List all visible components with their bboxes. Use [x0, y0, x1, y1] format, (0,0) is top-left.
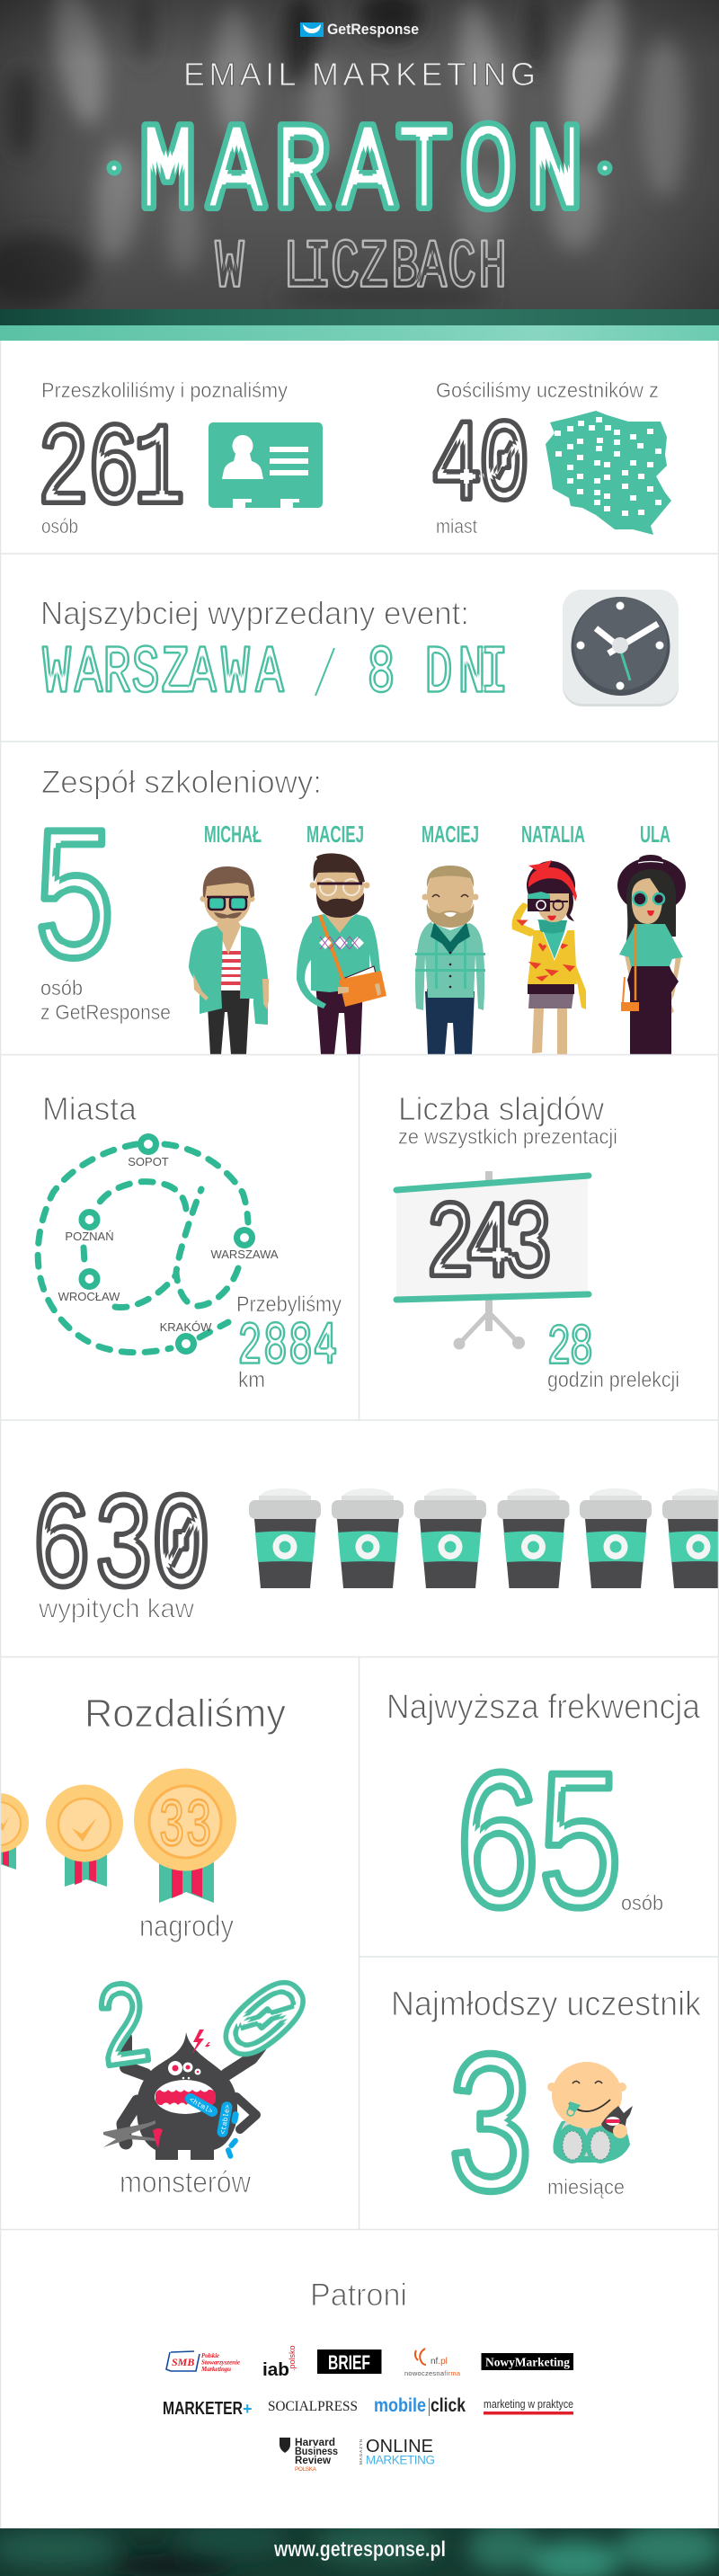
route stop: Sopot: [128, 1136, 169, 1168]
logo: SMB: Polskie: [201, 2352, 219, 2359]
name labels: MICHAŁ: [204, 821, 262, 848]
logo: SMB: SMB: [172, 2356, 194, 2368]
icon: coffee cup 2: [332, 1488, 404, 1588]
caption: godzin prelekcji: [547, 1368, 679, 1392]
icon: large medal 33: 33: [158, 1789, 212, 1866]
route stop: Sopot: SOPOT: [128, 1155, 169, 1168]
caption: monsters: monsterów: [120, 2165, 251, 2198]
name labels: NATALIA: [521, 821, 585, 848]
route stop: Kraków: [160, 1320, 212, 1352]
caption: 5 people: z GetResponse: [40, 1000, 171, 1024]
footer band: [0, 2524, 719, 2576]
name labels: ULA: [640, 821, 670, 848]
logo: marketing w praktyce: marketing w praktyce: [484, 2397, 573, 2411]
number 0 held by monster: 0: [182, 1954, 333, 2095]
unit label: miast: [436, 515, 477, 537]
logo: Brief: BRIEF: [328, 2351, 370, 2374]
number 2 held by monster: 2: [89, 1962, 160, 2101]
logo: Online Marketing: ONLINE: [366, 2437, 433, 2456]
logo: GetResponse: GetResponse: [327, 21, 419, 38]
icon: ID card: [209, 422, 323, 508]
heading: Gościliśmy uczestników z: [436, 378, 659, 402]
heading: Rozdaliśmy: [84, 1692, 286, 1736]
logo: iab polska: iab: [262, 2360, 289, 2380]
logo: Marketer+: MARKETER: [163, 2399, 243, 2419]
logo: mobile click: [374, 2395, 466, 2416]
decorative title dots: [106, 160, 613, 176]
icon: coffee cup 5: [580, 1488, 652, 1588]
logo: Harvard Business Review: [280, 2438, 338, 2473]
route stop: Poznań: POZNAŃ: [65, 1230, 114, 1243]
number 243: 243: [426, 1186, 553, 1308]
caption: 5 people: [40, 976, 171, 1024]
illustration: baby: [547, 2062, 633, 2163]
logo: SMB: [166, 2351, 240, 2373]
panel: trained people: [38, 378, 323, 537]
panel: youngest participant: [391, 1985, 702, 2251]
title: W liczbach: W LICZBACH: [216, 231, 507, 306]
name labels: MACIEJ: [306, 821, 364, 848]
logo: iab polska: [262, 2345, 297, 2380]
heading: Przeszkoliliśmy i poznaliśmy: [41, 378, 288, 402]
name labels: MACIEJ: [422, 821, 479, 848]
icon: coffee cup 3: [414, 1488, 486, 1588]
figure: Natalia with camera: [512, 860, 586, 1054]
route stop: Warszawa: WARSZAWA: [210, 1248, 279, 1261]
panel: cities of origin: [431, 378, 671, 537]
panel: patrons: [163, 2278, 573, 2473]
illustration: monster: [103, 2030, 261, 2160]
number 40: 40: [431, 403, 530, 533]
panel: highest attendance: [386, 1688, 701, 1967]
route stop: Warszawa: [210, 1230, 279, 1261]
caption: months: miesiące: [547, 2175, 625, 2198]
logo: mobile click: click: [431, 2395, 466, 2416]
icon: clock: [563, 590, 679, 706]
logo: Online Marketing: MAGAZYN: [359, 2439, 363, 2465]
caption: awards: nagrody: [139, 1909, 234, 1942]
logo: marketing w praktyce: [484, 2397, 573, 2414]
logo: Online Marketing: [359, 2437, 435, 2466]
illustration: monster: <html>: [188, 2096, 214, 2116]
logo: NowyMarketing: NowyMarketing: [485, 2357, 570, 2369]
icon: coffee cup 6: [662, 1488, 719, 1588]
heading: Patroni: [310, 2278, 407, 2313]
footer url: www.getresponse.pl: [273, 2537, 446, 2562]
figure: Maciej in plaid shirt: [415, 866, 485, 1054]
figure: Maciej with bag: [297, 853, 386, 1054]
panel: coffee: [36, 1488, 718, 1622]
number 630: [36, 1492, 208, 1589]
icon: small medal: [0, 1793, 29, 1870]
route stop: Wrocław: [58, 1271, 120, 1303]
panel: slides count: [396, 1090, 679, 1392]
icon: large medal 33: [134, 1769, 236, 1903]
unit: km: km: [238, 1368, 265, 1392]
icon: coffee cup 4: [498, 1488, 570, 1588]
map of Poland: [546, 411, 671, 535]
heading: Najmłodszy uczestnik: [391, 1985, 702, 2023]
illustration: monster: <table>: [219, 2104, 233, 2136]
panel: monsters: [89, 1954, 333, 2198]
heading: Najszybciej wyprzedany event:: [40, 595, 469, 631]
number 261: 261: [38, 406, 185, 537]
route stop: Poznań: [65, 1212, 114, 1243]
number 5: 5: [31, 799, 118, 1014]
logo: nf.pl: nf.pl: [431, 2357, 448, 2367]
caption: 5 people: osób: [40, 976, 83, 999]
dashed route map: [38, 1144, 248, 1353]
unit label: osób: [621, 1891, 663, 1914]
name labels: [204, 821, 670, 848]
caption: wypitych kaw: [38, 1594, 194, 1623]
logo: nf.pl: [404, 2349, 461, 2377]
number 630: 630: [31, 1473, 211, 1626]
logo: mobile click: mobile: [374, 2395, 426, 2416]
title: Email Marketing: EMAIL MARKETING: [183, 56, 536, 93]
figure: Ula with hat: [617, 855, 686, 1054]
logo: iab polska: .polsko: [288, 2345, 297, 2371]
logo: Marketer+: +: [243, 2400, 253, 2418]
heading: Miasta: [42, 1090, 138, 1127]
value: Warszawa: WARSZAWA: [43, 637, 284, 712]
panel: training team: [31, 765, 686, 1054]
logo: Harvard Business Review: Business: [295, 2447, 338, 2457]
logo: Harvard Business Review: Review: [295, 2456, 331, 2466]
panel: awards: [0, 1692, 286, 1942]
number 28: 28: [547, 1318, 593, 1381]
route stop: Wrocław: WROCŁAW: [58, 1290, 120, 1303]
value: 8 dni: 8 DNI: [368, 637, 509, 712]
subheading: ze wszystkich prezentacji: [398, 1125, 617, 1149]
label: travelled: Przebyliśmy: [236, 1292, 342, 1317]
logo: SocialPress: SOCIALPRESS: [268, 2399, 358, 2414]
number 3: 3: [445, 2021, 536, 2251]
heading: Zespół szkoleniowy:: [41, 765, 322, 800]
panel: fastest sold out event: [40, 590, 679, 712]
logo: Online Marketing: MARKETING: [366, 2454, 435, 2466]
heading: Liczba slajdów: [398, 1090, 605, 1127]
logo: SMB: Stowarzyszenie: [201, 2358, 240, 2366]
heading: Najwyższa frekwencja: [386, 1688, 701, 1726]
icon: projection screen: [396, 1171, 589, 1350]
panel: cities route: [38, 1090, 342, 1392]
logo: Harvard Business Review: POLSKA: [295, 2466, 317, 2473]
route stop: Kraków: KRAKÓW: [160, 1320, 212, 1334]
icon: medium medal: [46, 1785, 123, 1887]
header photo background: [0, 0, 719, 309]
number 2884: 2884: [238, 1313, 337, 1381]
icon: coffee cup 1: [249, 1488, 321, 1588]
slash divider: [315, 648, 334, 696]
logo: nf.pl: nowoczesnafirma: [404, 2369, 461, 2377]
number 65: 65: [452, 1740, 626, 1967]
figure: Michał: [189, 866, 269, 1054]
title: Maraton: MARATON: [139, 106, 583, 244]
unit label: osób: [41, 515, 78, 537]
logo: SMB: Marketingu: [200, 2366, 231, 2373]
logo: Harvard Business Review: Harvard: [295, 2438, 335, 2448]
